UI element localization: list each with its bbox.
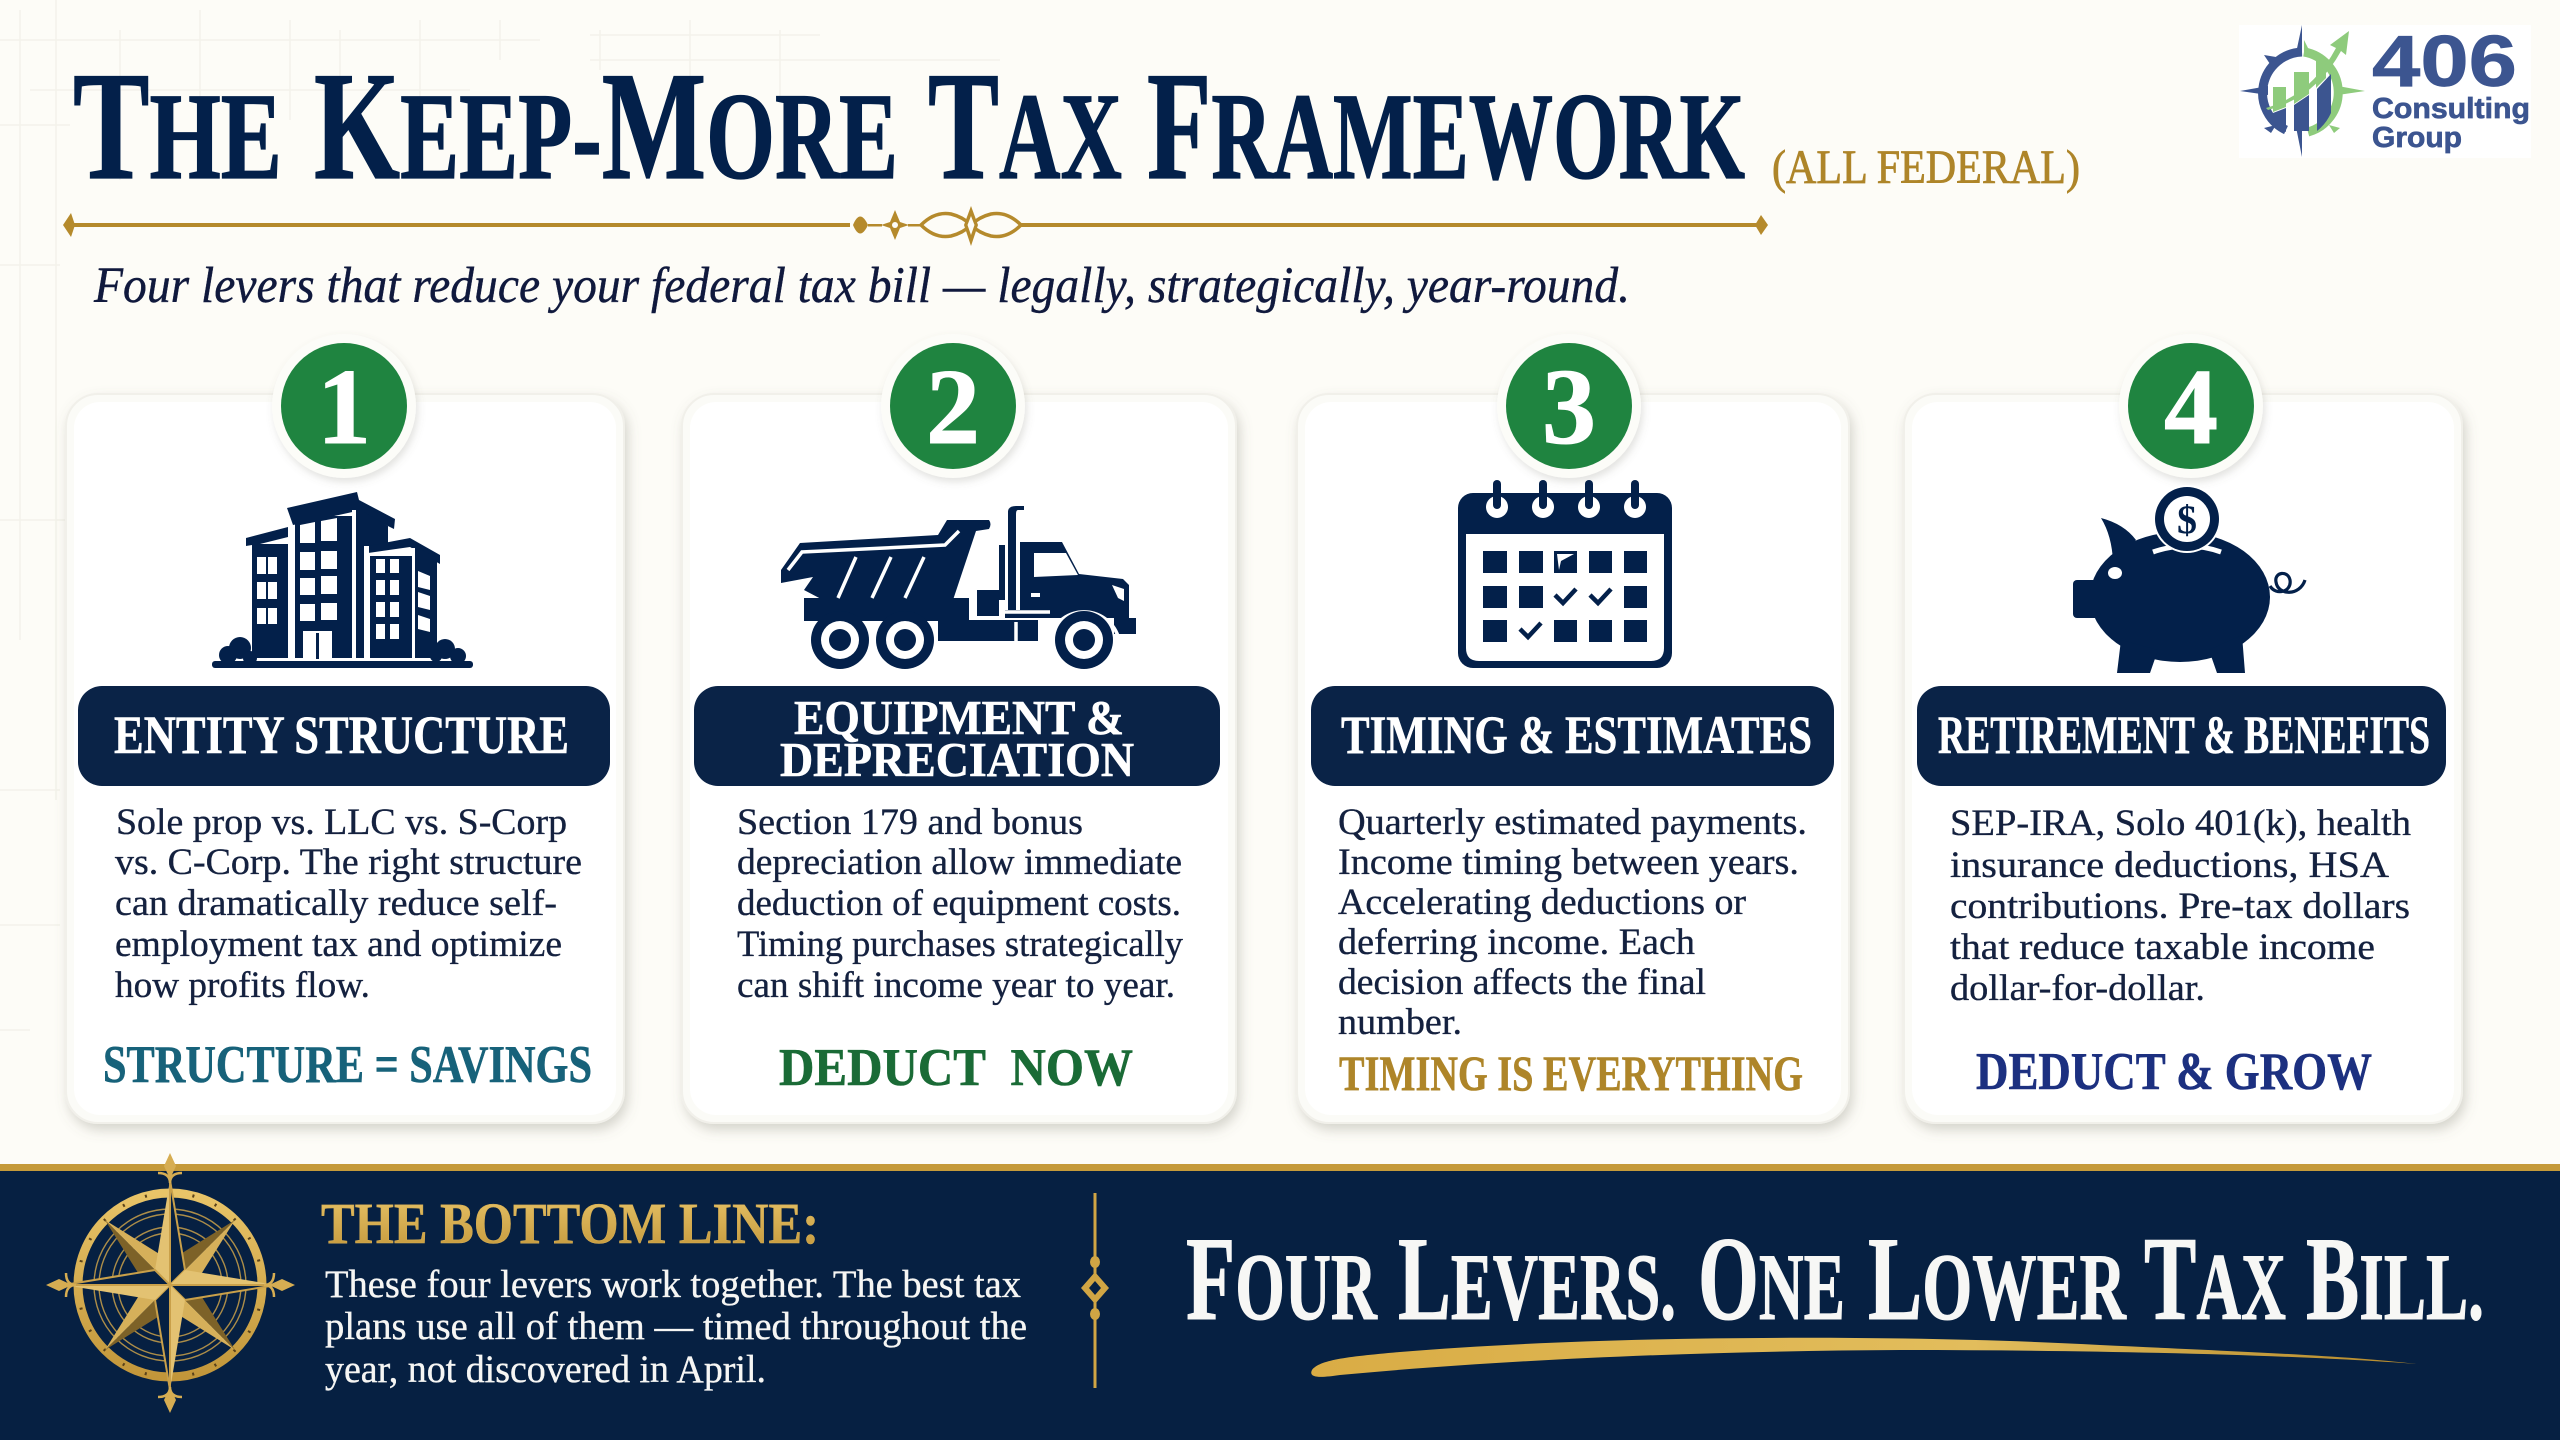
icon: dump truck bbox=[781, 506, 1136, 669]
icon: calendar bbox=[1458, 480, 1672, 668]
body text: can shift income year to year. bbox=[737, 965, 1175, 1006]
slogan: ONE bbox=[1698, 1212, 1845, 1345]
number badge 4 bbox=[2119, 334, 2263, 478]
footer band bbox=[0, 1153, 2560, 1440]
body text: insurance deductions, HSA bbox=[1950, 845, 2389, 886]
body text: deferring income. Each bbox=[1338, 922, 1696, 963]
number badge 3: 3 bbox=[1542, 348, 1596, 467]
title: THE bbox=[73, 40, 282, 212]
heading bar: DEPRECIATION bbox=[780, 732, 1134, 787]
body text bbox=[737, 802, 1183, 1006]
bottom line text: plans use all of them — timed throughout the bbox=[325, 1305, 1027, 1348]
panel: equipment and depreciation bbox=[682, 334, 1236, 1123]
vertical gold divider bbox=[1081, 1193, 1109, 1388]
title qualifier: all federal: (ALL FEDERAL) bbox=[1772, 141, 2080, 194]
body text: Sole prop vs. LLC vs. S-Corp bbox=[116, 802, 567, 843]
body text bbox=[115, 802, 582, 1006]
subtitle: Four levers that reduce your federal tax bill — legally, strategically, year-round. bbox=[93, 258, 1630, 314]
logo compass mark bbox=[2240, 25, 2365, 157]
slogan bbox=[1186, 1212, 2484, 1345]
body text: dollar-for-dollar. bbox=[1950, 968, 2205, 1009]
number badge 1: 1 bbox=[317, 348, 371, 467]
logo: 406 Consulting Group bbox=[2239, 22, 2531, 158]
body text bbox=[1950, 803, 2412, 1009]
body text: vs. C-Corp. The right structure bbox=[115, 842, 582, 883]
title bbox=[73, 40, 1745, 212]
slogan: LEVERS. bbox=[1398, 1212, 1676, 1345]
number badge 4: 4 bbox=[2164, 348, 2218, 467]
heading bar: EQUIPMENT & bbox=[794, 690, 1124, 745]
number badge 1 bbox=[272, 334, 416, 478]
tagline: TIMING IS EVERYTHING bbox=[1339, 1045, 1803, 1101]
body text: decision affects the final bbox=[1338, 962, 1706, 1003]
body text: how profits flow. bbox=[115, 965, 370, 1006]
icon: piggy bank bbox=[2073, 485, 2305, 673]
body text: Accelerating deductions or bbox=[1338, 882, 1746, 923]
icon: office buildings bbox=[212, 492, 473, 668]
panel: retirement and benefits bbox=[1904, 334, 2462, 1123]
tagline: DEDUCT & GROW bbox=[1976, 1043, 2372, 1101]
body text: Quarterly estimated payments. bbox=[1338, 802, 1807, 843]
icon: gold compass rose bbox=[46, 1153, 295, 1413]
bottom line text bbox=[325, 1263, 1027, 1391]
body text: Timing purchases strategically bbox=[737, 924, 1183, 965]
tagline: DEDUCT NOW bbox=[779, 1039, 1133, 1097]
body text: can dramatically reduce self- bbox=[115, 883, 557, 924]
slogan: LOWER bbox=[1868, 1212, 2127, 1345]
title: FRAMEWORK bbox=[1147, 40, 1745, 212]
heading bar bbox=[78, 686, 610, 786]
logo: 406 Consulting Group: Consulting bbox=[2372, 93, 2530, 125]
icon: piggy bank: $ bbox=[2177, 497, 2197, 542]
number badge 3 bbox=[1497, 334, 1641, 478]
logo: 406 Consulting Group: Group bbox=[2372, 122, 2462, 154]
heading bar bbox=[1311, 686, 1834, 786]
bottom line heading: THE BOTTOM LINE: bbox=[321, 1191, 819, 1256]
body text: contributions. Pre-tax dollars bbox=[1950, 886, 2410, 927]
title: TAX bbox=[928, 40, 1122, 212]
number badge 2: 2 bbox=[926, 348, 980, 467]
heading bar bbox=[694, 686, 1220, 787]
heading bar: TIMING & ESTIMATES bbox=[1341, 705, 1812, 765]
slogan: TAX bbox=[2144, 1212, 2286, 1345]
tagline: STRUCTURE = SAVINGS bbox=[103, 1036, 592, 1094]
panel: entity structure bbox=[66, 334, 624, 1123]
ornamental gold rule bbox=[63, 206, 1768, 246]
title: KEEP-MORE bbox=[314, 40, 898, 212]
panel: timing and estimates bbox=[1297, 334, 1849, 1123]
body text: that reduce taxable income bbox=[1950, 927, 2375, 968]
body text: Income timing between years. bbox=[1338, 842, 1799, 883]
body text: deduction of equipment costs. bbox=[737, 883, 1181, 924]
body text: SEP-IRA, Solo 401(k), health bbox=[1950, 803, 2412, 844]
slogan: BILL. bbox=[2306, 1212, 2484, 1345]
body text bbox=[1338, 802, 1807, 1043]
logo: 406 Consulting Group: 406 bbox=[2372, 22, 2517, 102]
slogan: FOUR bbox=[1186, 1212, 1378, 1345]
body text: employment tax and optimize bbox=[115, 924, 562, 965]
body text: Section 179 and bonus bbox=[737, 802, 1083, 843]
bottom line text: year, not discovered in April. bbox=[325, 1348, 766, 1391]
bottom line text: These four levers work together. The best tax bbox=[325, 1263, 1021, 1306]
body text: depreciation allow immediate bbox=[737, 842, 1182, 883]
number badge 2 bbox=[881, 334, 1025, 478]
body text: number. bbox=[1338, 1002, 1462, 1043]
heading bar: ENTITY STRUCTURE bbox=[114, 705, 569, 765]
gold swoosh bbox=[1311, 1338, 2416, 1377]
heading bar bbox=[1917, 686, 2446, 786]
